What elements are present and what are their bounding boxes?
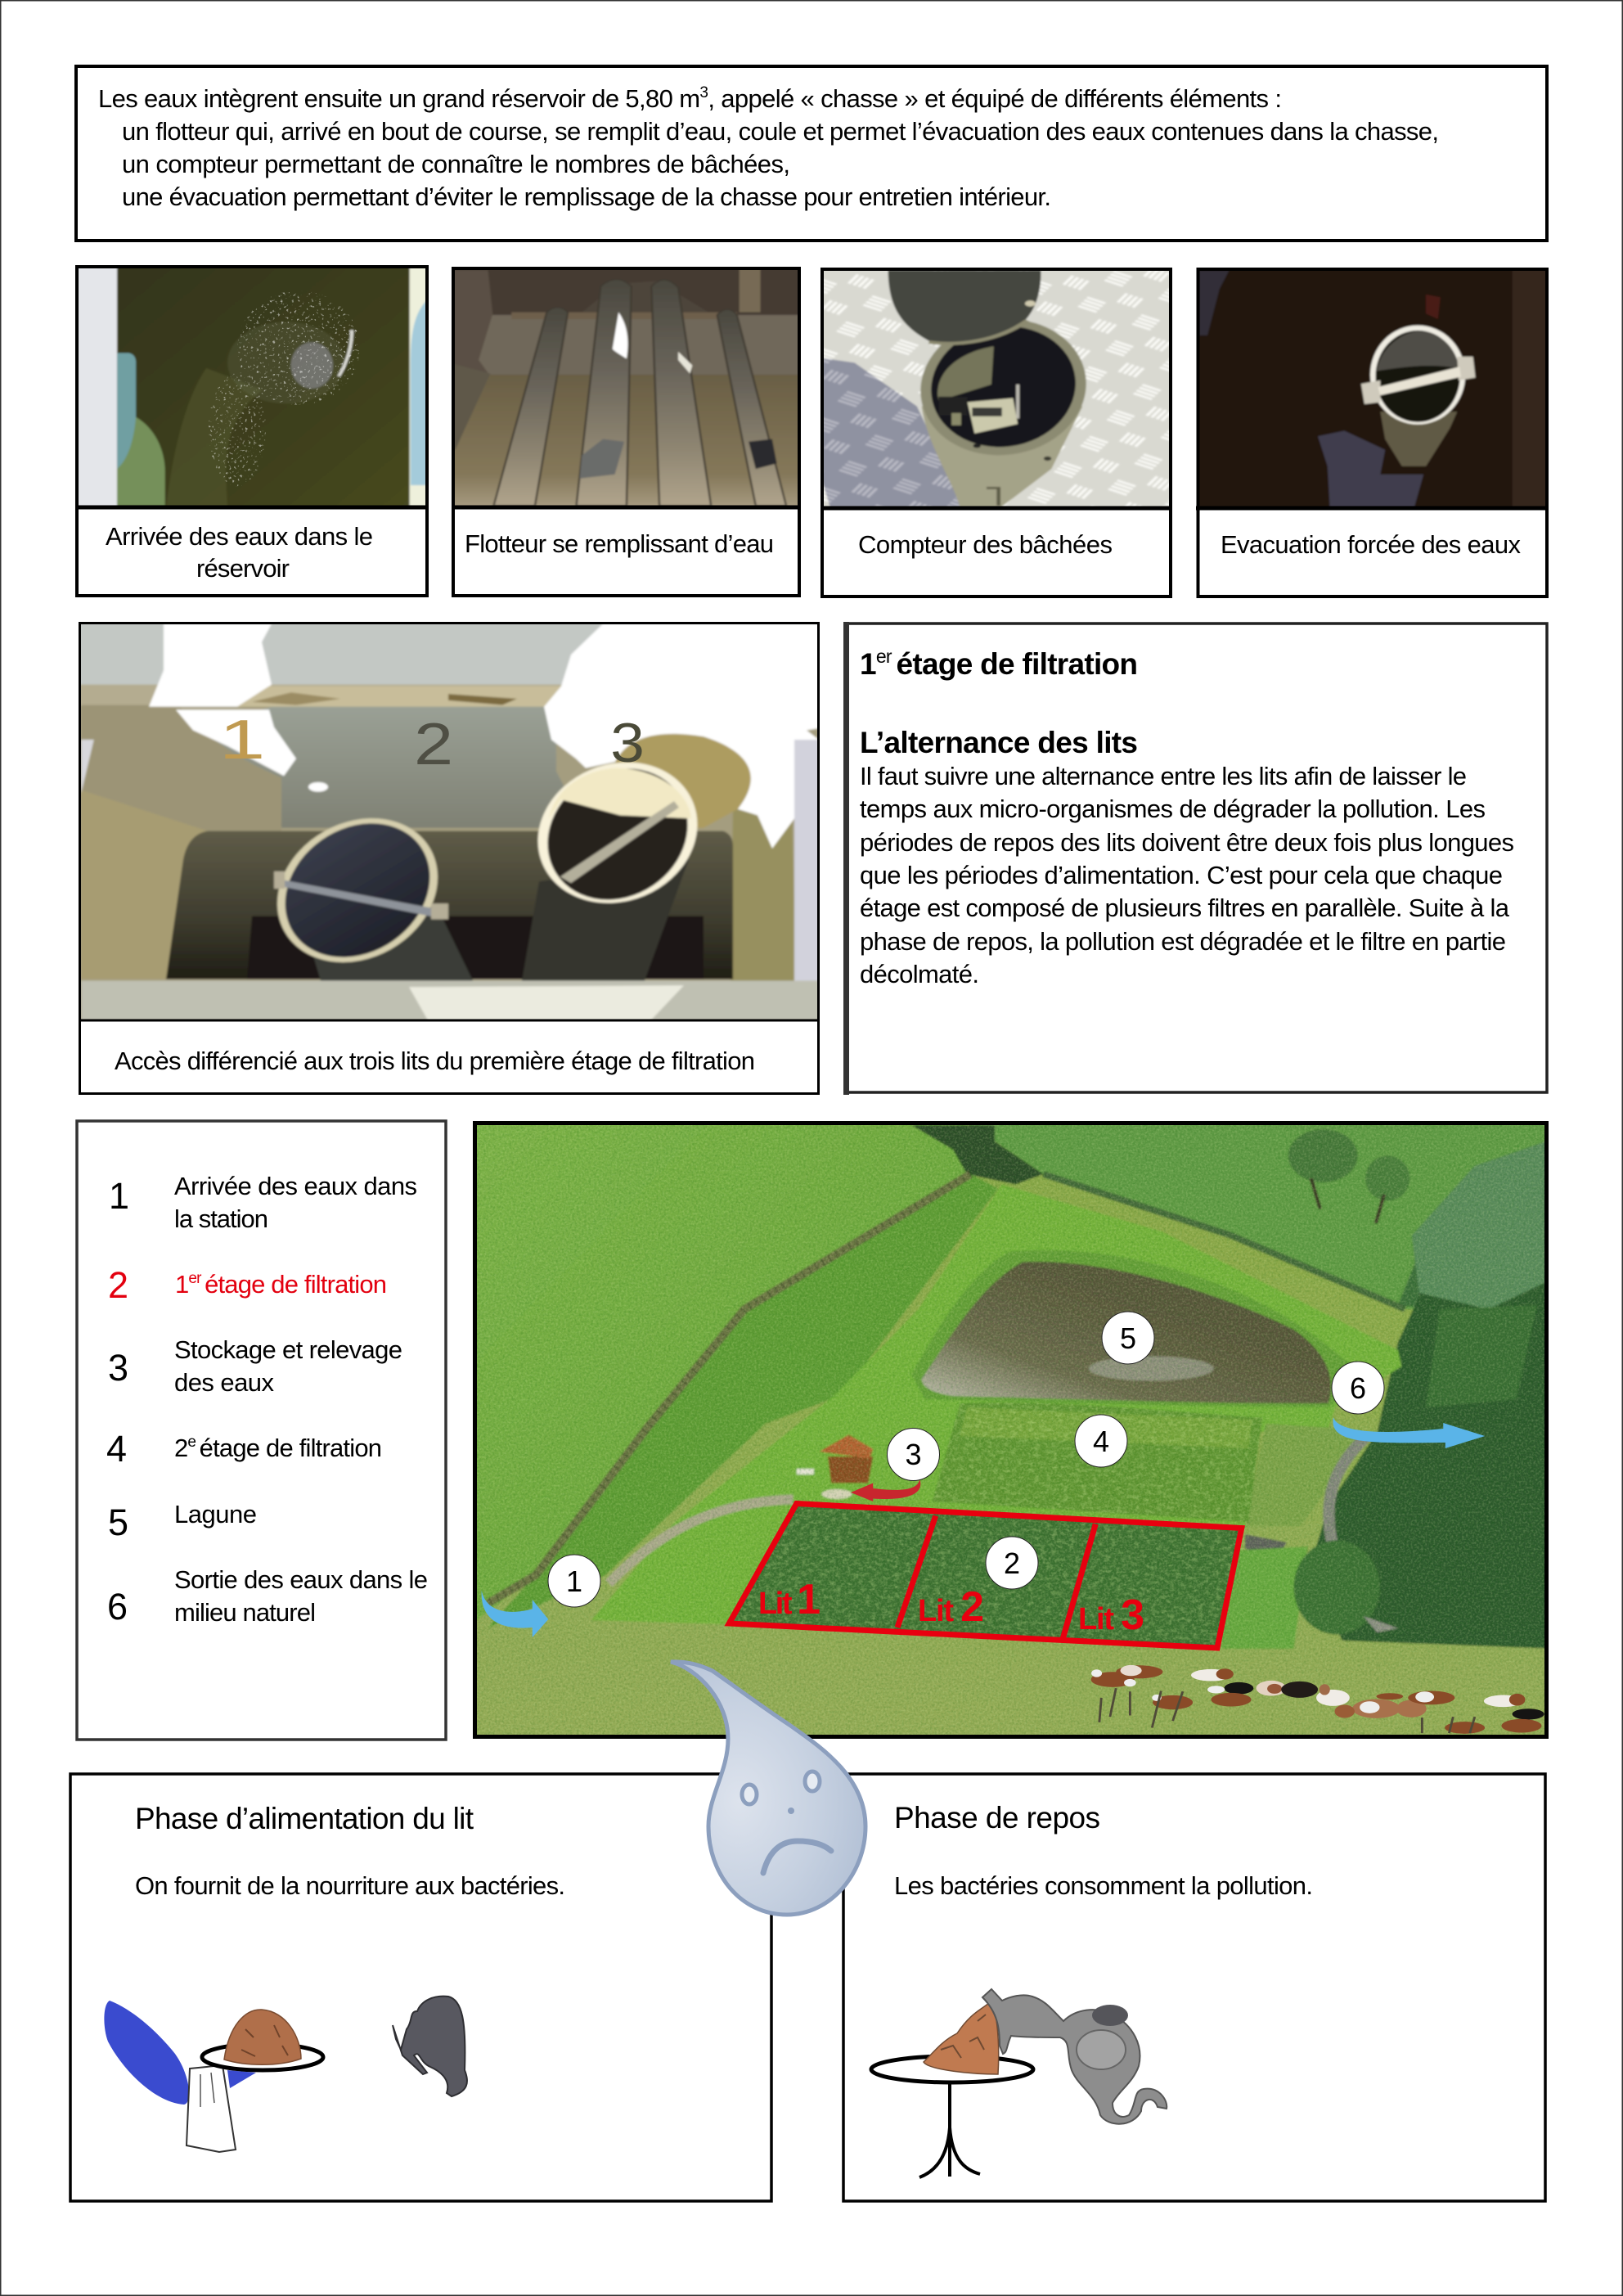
marker 6 [1332, 1362, 1384, 1414]
panel: flotteur [448, 266, 803, 596]
body text: temps aux micro-organismes de dégrader la pollution. Les [860, 795, 1486, 823]
pond [922, 1262, 1331, 1403]
hedge top [911, 1125, 1044, 1185]
gravel path [609, 1499, 794, 1583]
panel: arrivée des eaux [74, 264, 432, 596]
legend item 2: étage de filtration [205, 1270, 387, 1299]
heading: 1er étage: 1 [860, 647, 877, 681]
panel: accès aux trois lits [75, 620, 826, 1093]
marker 1: 1 [566, 1564, 582, 1598]
photo: water arriving in tank [74, 264, 432, 510]
heading: alternance: L’alternance des lits [860, 726, 1138, 759]
legend item 4: 4 [106, 1428, 127, 1470]
photo: counter inside pipe [816, 268, 1176, 510]
photo: floats in the tank [448, 266, 803, 508]
legend item 5 [108, 1500, 257, 1543]
body text: phase de repos, la pollution est dégradée et le filtre en partie [860, 927, 1506, 956]
marker 4: 4 [1093, 1425, 1109, 1458]
heading: 1er étage: étage de filtration [897, 647, 1138, 681]
sad mouth [763, 1841, 831, 1873]
heading: 1er étage: er [876, 646, 897, 667]
photo: overflow pipe in dark water [1193, 268, 1553, 510]
legend item 3: des eaux [174, 1368, 275, 1397]
handwritten number 2: 2 [414, 711, 453, 777]
embankment [591, 1185, 1401, 1624]
photo: aerial landscape [466, 1113, 1558, 1743]
legend item 2: 1 [175, 1270, 189, 1299]
heading: phase d'alimentation: Phase d’alimentation du lit [135, 1802, 474, 1835]
legend item 1: Arrivée des eaux dans [174, 1172, 417, 1200]
trees top right [1288, 1129, 1358, 1182]
panel: évacuation [1193, 268, 1553, 597]
illustration: table with food [871, 1999, 1033, 2177]
heading: phase de repos: Phase de repos [894, 1801, 1100, 1835]
panel: 1er étage de filtration [843, 622, 1547, 1095]
text: intro line 3: un compteur permettant de connaître le nombres de bâchées, [122, 150, 790, 178]
nose [788, 1808, 794, 1814]
marker 5: 5 [1120, 1321, 1136, 1355]
body text: périodes de repos des lits doivent être deux fois plus longues [860, 828, 1514, 857]
slope [488, 1174, 998, 1628]
caption: flotteur: Flotteur se remplissant d’eau [465, 529, 774, 558]
legend item 4: e [187, 1434, 200, 1451]
arrow: storage [851, 1479, 920, 1501]
legend item 3: 3 [108, 1347, 128, 1389]
arrow: inlet [482, 1591, 548, 1637]
handwritten number 1: 1 [219, 709, 265, 771]
body text [860, 762, 1514, 988]
text: intro line 1: 3 [699, 84, 708, 101]
legend item 3: Stockage et relevage [174, 1335, 402, 1364]
legend item 6: 6 [107, 1586, 128, 1627]
body text: que les périodes d’alimentation. C’est pour cela que chaque [860, 861, 1503, 889]
handwritten number 3: 3 [610, 712, 645, 774]
legend item 6: Sortie des eaux dans le [174, 1565, 428, 1594]
legend item 4: 2 [174, 1434, 188, 1462]
text: intro line 1: Les eaux intègrent ensuite un grand réservoir de 5,80 m [98, 84, 700, 113]
legend item 4 [106, 1428, 382, 1470]
panel: aerial photo of the station [466, 1113, 1558, 1743]
marker 1 [548, 1555, 600, 1607]
hillside top right [953, 1113, 1558, 1317]
bed label: Lit 1: Lit 1 [758, 1576, 820, 1623]
caption: arrivée: Arrivée des eaux dans le [106, 522, 373, 551]
legend item 1: 1 [109, 1175, 129, 1217]
text: intro line 2: un flotteur qui, arrivé en bout de course, se remplit d’eau, coule et permet l’évacuation des eaux contenues dans la chasse, [122, 117, 1439, 146]
marker 2: 2 [1004, 1546, 1020, 1580]
panel: introduction text [76, 66, 1547, 241]
caption: accès différencié: Accès différencié aux trois lits du première étage de filtration [115, 1047, 755, 1075]
marker 5 [1102, 1312, 1154, 1364]
legend item 5: 5 [108, 1501, 128, 1543]
legend item 1: la station [174, 1204, 268, 1233]
photo: concrete chamber with pipes [75, 620, 826, 1023]
cows in the foreground [1091, 1665, 1544, 1734]
panel: compteur [816, 268, 1176, 597]
marker 3: 3 [905, 1438, 922, 1471]
legend item 6: milieu naturel [174, 1598, 316, 1627]
left eye [742, 1785, 757, 1804]
bed label: Lit 2: Lit 2 [918, 1583, 984, 1631]
arrow: outlet [1333, 1417, 1485, 1448]
text: intro line 1: , appelé « chasse » et équipé de différents éléments : [708, 84, 1282, 113]
legend item 3 [108, 1335, 402, 1397]
text: intro line 4: une évacuation permettant d’éviter le remplissage de la chasse pour entretien intérieur. [122, 182, 1051, 211]
body text: Il faut suivre une alternance entre les lits afin de laisser le [860, 762, 1467, 790]
strip [1245, 1424, 1363, 1526]
legend item 2: er [188, 1270, 205, 1287]
legend item 1 [109, 1172, 417, 1233]
bed 4 [933, 1402, 1262, 1522]
red beds [729, 1504, 1242, 1648]
red outline of the three beds [729, 1504, 1242, 1648]
illustration: bacterium eating [982, 1989, 1167, 2124]
marker 2 [986, 1537, 1038, 1589]
panel: phase d'alimentation [70, 1774, 771, 2201]
marker 6: 6 [1350, 1371, 1366, 1405]
hillside left [466, 1113, 970, 1628]
right eye [805, 1772, 820, 1791]
illustration: waiter hand with plate of food [104, 2001, 323, 2152]
legend item 6 [107, 1565, 428, 1627]
bed label: Lit 3: Lit 3 [1078, 1591, 1144, 1639]
caption: évacuation: Evacuation forcée des eaux [1221, 530, 1522, 559]
text: nourriture: On fournit de la nourriture aux bactéries. [135, 1871, 565, 1900]
icon: sad water drop mascot [671, 1662, 865, 1915]
caption: réservoir: réservoir [196, 554, 290, 583]
caption: compteur: Compteur des bâchées [858, 530, 1113, 559]
marker 3 [887, 1429, 939, 1481]
legend item 4: étage de filtration [200, 1434, 382, 1462]
legend item 2 [108, 1264, 387, 1306]
panel: legend [77, 1121, 446, 1740]
panel: phase de repos [843, 1774, 1545, 2201]
legend item 5: Lagune [174, 1500, 257, 1528]
marker 4 [1075, 1415, 1127, 1467]
body text: décolmaté. [860, 960, 979, 988]
legend item 2: 2 [108, 1264, 128, 1306]
fence of upper lagoon [1044, 1174, 1405, 1309]
body text: étage est composé de plusieurs filtres en parallèle. Suite à la [860, 894, 1510, 922]
house [828, 1456, 873, 1483]
noise texture [474, 1123, 1547, 1737]
forest right [1307, 1137, 1558, 1649]
text: consomment: Les bactéries consomment la pollution. [894, 1871, 1313, 1900]
illustration: small bacterium [393, 1997, 467, 2096]
